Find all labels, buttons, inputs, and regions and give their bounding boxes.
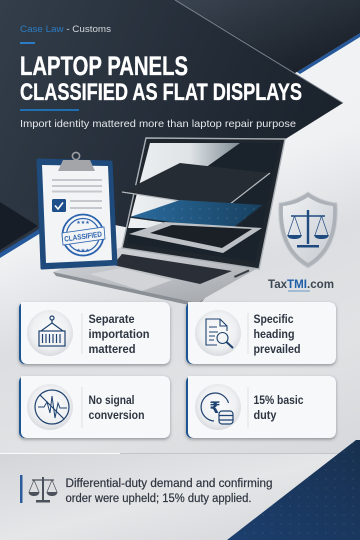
icon: container on hook [27,310,73,356]
icon: rupee coin with stack [195,384,241,430]
footer text [66,478,272,505]
footer accent bar [20,475,22,503]
shield body [279,192,337,268]
icon: rupee coin with stack: ₹ [209,398,221,417]
classified stamp: CLASSIFIED [64,229,103,244]
card: separate importation [19,302,170,364]
card text [254,312,300,356]
layer: backlight frame [129,222,262,253]
card text: duty [254,408,277,422]
laptop illustration [53,138,285,307]
screen glare [128,143,240,228]
header eyebrow: Case Law - Customs: Case Law - Customs [20,24,111,35]
footer panel [0,440,360,540]
card text: mattered [88,342,136,356]
board [38,160,116,268]
brand: TaxTMI.com: TaxTMI.com [268,279,334,291]
laptop base [53,247,258,303]
title rule [20,109,79,111]
classified stamp [62,214,105,256]
card: 15% basic duty [186,376,336,438]
paper [42,165,112,263]
classified stamp: ★★★ [76,220,90,226]
card: specific heading [186,302,336,364]
laptop screen [127,143,280,262]
footer text: order were upheld; 15% duty applied. [66,493,252,505]
card text: prevailed [254,342,300,356]
subtitle: Import identity mattered more than laptop repair purpose [20,118,296,130]
layer: circuit board [130,200,263,235]
card text [254,393,304,422]
card text [88,393,144,422]
footer text: Differential-duty demand and confirming [66,478,272,490]
card text: 15% basic [254,393,304,407]
title: LAPTOP PANELS [20,51,188,81]
card text: Separate [88,312,135,326]
clipboard [38,152,116,268]
accent rule [20,42,35,44]
card text: heading [254,327,294,341]
card text: importation [88,327,150,341]
clip [58,152,95,171]
laptop lid [122,138,285,269]
icon: document with magnifier [195,310,241,356]
document lines [52,179,102,209]
title [20,51,302,106]
navy corner triangle [227,440,360,540]
card text: Specific [254,312,294,326]
card text [88,312,150,356]
scales [287,210,329,248]
keyboard [113,254,232,284]
checkbox [52,199,66,212]
ports [234,269,249,278]
card text: No signal [88,393,134,407]
icon: scales [28,477,58,502]
decorative header shapes [0,0,360,258]
card: no signal conversion [19,376,170,438]
shield with scales of justice [279,192,337,268]
layer: dark display panel [122,163,270,208]
touchpad [90,268,172,291]
card text: conversion [88,408,144,422]
icon: crossed signal [27,384,73,430]
classified stamp: ★★★ [76,248,90,254]
